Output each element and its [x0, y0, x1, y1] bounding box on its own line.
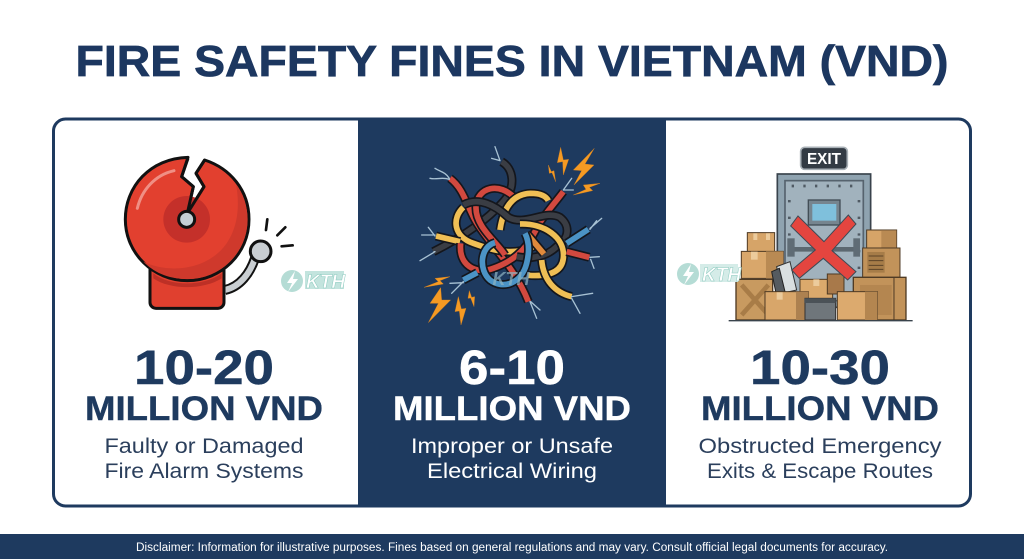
text block: alarm fine: [85, 342, 323, 483]
icon: tangled electrical wires: [420, 147, 602, 325]
icon: KTH watermark right: [677, 263, 742, 286]
text block: alarm fine: Fire Alarm Systems: [104, 460, 304, 483]
panel: wiring navy column: [358, 118, 666, 507]
text block: wiring fine: 6-10: [459, 342, 565, 395]
text block: wiring fine: [393, 342, 631, 483]
title: FIRE SAFETY FINES IN VIETNAM (VND): [76, 37, 948, 86]
icon: blocked exit door with boxes: EXIT: [807, 151, 842, 168]
icon: KTH watermark middle: KTH: [492, 269, 530, 289]
icon: KTH watermark left: [281, 270, 346, 293]
text block: alarm fine: 10-20: [134, 342, 274, 395]
text block: wiring fine: Electrical Wiring: [427, 460, 597, 483]
icon: KTH watermark left: KTH: [306, 272, 346, 293]
text block: wiring fine: MILLION VND: [393, 390, 631, 428]
text block: wiring fine: Improper or Unsafe: [411, 435, 613, 458]
footer disclaimer bar: [0, 534, 1024, 559]
icon: damaged fire alarm bell: [125, 157, 293, 308]
text block: alarm fine: MILLION VND: [85, 390, 323, 428]
text block: exit fine: [698, 342, 942, 483]
text block: exit fine: Exits & Escape Routes: [707, 460, 933, 483]
footer disclaimer bar: Disclaimer: Information for illustrative purposes. Fines based on general regulations and may vary. Consult official legal documents for accuracy.: [136, 542, 888, 554]
icon: blocked exit door with boxes: [729, 147, 913, 321]
text block: exit fine: 10-30: [750, 342, 890, 395]
panel: fines container: [54, 118, 970, 507]
text block: alarm fine: Faulty or Damaged: [104, 435, 304, 458]
text block: exit fine: Obstructed Emergency: [698, 435, 942, 458]
icon: KTH watermark right: KTH: [702, 265, 742, 286]
text block: exit fine: MILLION VND: [701, 390, 939, 428]
